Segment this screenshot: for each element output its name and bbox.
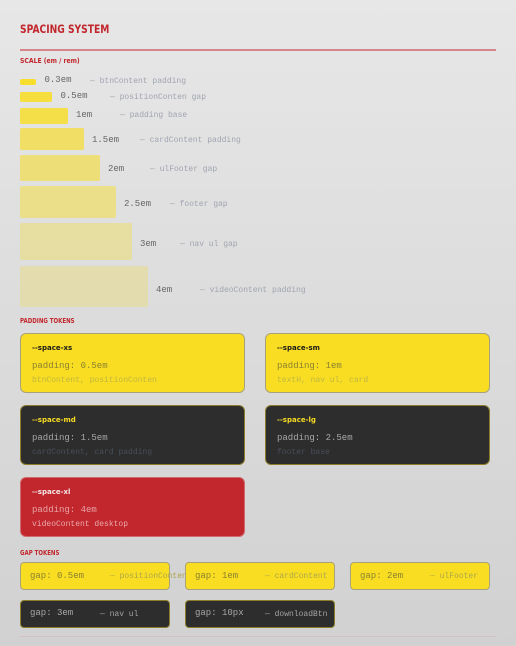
scale row 1.5em: 1.5em [92, 134, 119, 144]
card: space-xl [20, 477, 245, 537]
scale row 2.5em: — footer gap [170, 200, 228, 209]
card: space-lg: --space-lg [277, 416, 316, 424]
card: space-xl: padding: 4em [32, 505, 97, 515]
scale list [20, 75, 306, 307]
card: space-md: --space-md [32, 416, 76, 424]
scale row 1em: — padding base [120, 111, 187, 120]
card: space-sm: --space-sm [277, 344, 320, 352]
scale row 1.5em: — cardContent padding [140, 136, 241, 144]
gap token 2em [350, 562, 490, 590]
scale row 1em [20, 108, 187, 124]
gap token 1em [185, 562, 335, 590]
card: space-md: cardContent, card padding [32, 448, 152, 457]
scale row 2.5em: 2.5em [124, 199, 151, 209]
gap token 3em: gap: 3em [30, 608, 73, 618]
gap token 2em: gap: 2em [360, 570, 403, 580]
card: space-xl: --space-xl [32, 488, 70, 496]
card: space-xs: btnContent, positionConten [32, 376, 157, 385]
scale row 1.5em [20, 128, 241, 150]
card: space-lg: padding: 2.5em [277, 433, 353, 443]
scale row 4em [20, 266, 306, 307]
gap token 1em: gap: 1em [195, 570, 238, 580]
scale row 3em: 3em [140, 239, 156, 249]
scale row 0.5em: — positionConten gap [110, 92, 206, 102]
scale row 0.5em: 0.5em [60, 91, 88, 101]
gap token 0.5em [20, 562, 170, 590]
scale row 2em [20, 155, 217, 181]
gap token 1em: — cardContent [265, 572, 327, 580]
card: space-sm: padding: 1em [277, 361, 342, 371]
scale row 2em: — ulFooter gap [150, 165, 217, 174]
scale row 2em: 2em [108, 164, 124, 174]
heading: scale: SCALE (em / rem) [20, 57, 80, 65]
card: space-sm [265, 333, 490, 393]
gap token 10px [185, 600, 335, 628]
gap token 0.5em: gap: 0.5em [30, 570, 84, 580]
gap token 3em [20, 600, 170, 628]
heading: padding tokens: PADDING TOKENS [20, 316, 75, 324]
heading: gap tokens: GAP TOKENS [20, 549, 59, 557]
card: space-lg [265, 405, 490, 465]
gap token 2em: — ulFooter [430, 572, 478, 580]
scale row 0.3em: — btnContent padding [90, 76, 186, 86]
scale row 3em: — nav ul gap [180, 240, 238, 249]
gap token 0.5em: — positionConten [110, 572, 187, 580]
title: SPACING SYSTEM [20, 22, 109, 36]
scale row 0.5em [20, 91, 206, 102]
card: space-md [20, 405, 245, 465]
card: space-xl: videoContent desktop [32, 520, 128, 529]
scale row 3em [20, 223, 238, 260]
card: space-sm: textH, nav ul, card [277, 376, 368, 385]
gap token 10px: gap: 10px [195, 608, 244, 618]
scale row 4em: — videoContent padding [200, 286, 306, 295]
card: space-xs: --space-xs [32, 344, 72, 352]
card: space-xs: padding: 0.5em [32, 361, 108, 371]
card: space-lg: footer base [277, 448, 330, 457]
gap token 10px: — downloadBtn [265, 610, 327, 618]
card: space-xs [20, 333, 245, 393]
scale row 4em: 4em [156, 285, 172, 295]
scale row 2.5em [20, 186, 228, 218]
scale row 1em: 1em [76, 110, 92, 120]
scale row 0.3em: 0.3em [44, 75, 72, 85]
scale row 0.3em [20, 75, 186, 86]
gap token 3em: — nav ul [100, 610, 138, 618]
card: space-md: padding: 1.5em [32, 433, 108, 443]
